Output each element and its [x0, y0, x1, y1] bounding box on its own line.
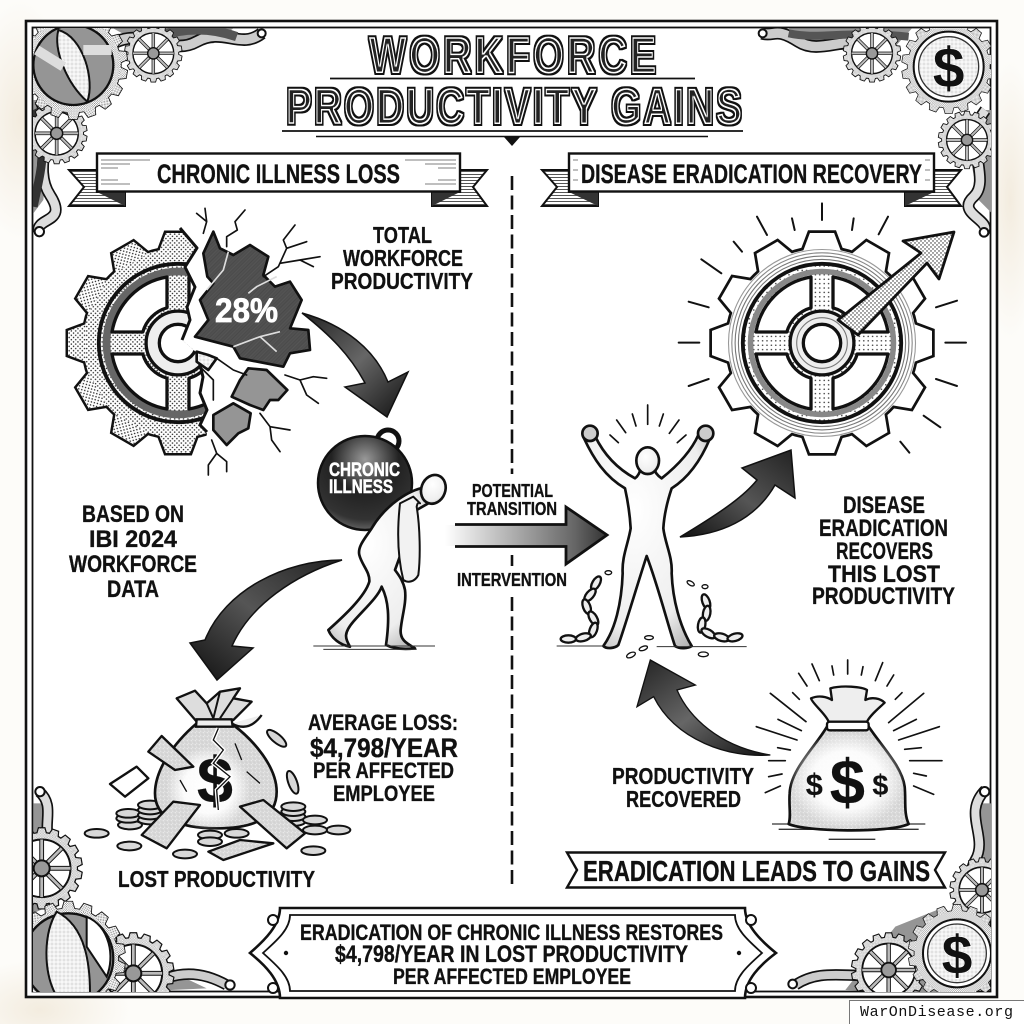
text: disease eradication recovers: DISEASE — [843, 492, 925, 519]
banner: eradication leads to gains: ERADICATION LEADS TO GAINS — [583, 856, 930, 888]
gear — [712, 233, 932, 453]
ground lines — [772, 824, 925, 839]
bent figure — [313, 471, 450, 649]
text: productivity recovered: RECOVERED — [626, 786, 741, 812]
text: average loss: PER AFFECTED — [313, 758, 454, 783]
text: average loss: AVERAGE LOSS: — [308, 710, 458, 735]
banner: chronic illness loss — [69, 154, 487, 206]
bag frill — [177, 688, 252, 722]
bills — [110, 736, 305, 860]
watermark: WarOnDisease.org — [860, 1004, 1013, 1021]
rays above figure — [610, 405, 686, 443]
coin dollar sign bottom right: $ — [942, 924, 972, 986]
text: disease eradication recovers — [812, 492, 955, 610]
rising arrow — [838, 232, 954, 335]
broken gear: chronic illness loss — [68, 208, 327, 475]
text: based on ibi 2024 workforce data: BASED ON — [82, 501, 184, 528]
bag body — [155, 723, 277, 828]
text: lost productivity: LOST PRODUCTIVITY — [118, 866, 315, 892]
title: PRODUCTIVITY GAINS — [286, 78, 742, 135]
coin dollar sign top right: $ — [933, 37, 964, 100]
transition arrow with labels: TRANSITION — [467, 499, 557, 519]
bag crack — [213, 728, 230, 810]
text: average loss: $4,798/YEAR — [310, 733, 458, 763]
watermark — [850, 1000, 1024, 1024]
broken dollar sign: $ — [197, 744, 233, 817]
chain fragments and ground — [557, 571, 747, 659]
28 percent label: 28% — [215, 292, 278, 330]
triumphant figure with broken chains — [557, 405, 747, 659]
title: WORKFORCE — [369, 26, 656, 84]
right broken chain — [697, 593, 743, 643]
intervention label: INTERVENTION — [457, 570, 567, 590]
transition arrow — [445, 507, 607, 564]
chronic illness ball — [318, 436, 412, 530]
text: disease eradication recovers: RECOVERS — [836, 538, 933, 565]
text: disease eradication recovers: THIS LOST — [828, 561, 940, 588]
bag tie — [196, 715, 262, 727]
text: productivity recovered — [612, 763, 754, 812]
text: average loss: EMPLOYEE — [333, 781, 435, 806]
full money bag with rays — [756, 660, 942, 839]
arrow: figure up to gear — [680, 450, 795, 537]
text: based on ibi 2024 workforce data: DATA — [107, 576, 159, 603]
plaque text: ERADICATION OF CHRONIC ILLNESS RESTORES — [300, 920, 723, 945]
recovery gear with rising arrow — [679, 203, 966, 453]
arrow: money bag up to figure — [637, 660, 770, 755]
standing figure — [582, 426, 713, 648]
arrow: gear down to weight — [302, 313, 408, 417]
text: total workforce productivity — [331, 222, 473, 294]
corner ornament: bottom right coin gear and vines — [787, 786, 991, 992]
gear fragments — [197, 352, 287, 445]
bag tie — [827, 722, 869, 730]
left gear remainder — [66, 230, 207, 456]
text: based on ibi 2024 workforce data: IBI 2024 — [89, 526, 177, 553]
full money bag with rays: $ — [806, 768, 823, 802]
corner ornament: top left gears and vines — [33, 28, 267, 238]
text: productivity recovered: PRODUCTIVITY — [612, 763, 754, 789]
text: disease eradication recovers: PRODUCTIVITY — [812, 583, 955, 610]
left broken chain — [561, 575, 603, 643]
text: disease eradication recovers: ERADICATION — [819, 515, 948, 542]
bottom plaque: PER AFFECTED EMPLOYEE — [393, 964, 631, 989]
transition arrow with labels — [445, 481, 607, 590]
banner: chronic illness loss: CHRONIC ILLNESS LOSS — [157, 159, 400, 189]
text: based on ibi 2024 workforce data: WORKFORCE — [69, 551, 197, 578]
bottom plaque — [250, 908, 776, 998]
chronic illness label: CHRONIC — [329, 459, 400, 481]
corner ornament: bottom left gears and vines — [33, 786, 236, 992]
arrow: figure down to money bag — [190, 560, 342, 680]
text: total workforce productivity: WORKFORCE — [343, 245, 463, 271]
money bag with losses — [85, 688, 350, 860]
text: average loss — [308, 710, 458, 806]
coins — [85, 801, 350, 858]
banner: disease eradication recovery — [542, 154, 961, 206]
potential transition label: POTENTIAL — [472, 481, 553, 501]
text: based on ibi 2024 workforce data — [69, 501, 197, 603]
crack edge of gear — [180, 228, 207, 432]
bottom plaque: $4,798/YEAR IN LOST PRODUCTIVITY — [335, 941, 688, 968]
dark broken chunk — [195, 232, 310, 367]
bent figure carrying chronic illness weight: ILLNESS — [329, 476, 393, 498]
rays around gear — [679, 203, 966, 453]
crack lines — [197, 208, 327, 475]
center dashed divider — [511, 176, 513, 888]
corner ornament: top right coin gear and vines — [759, 20, 996, 237]
weight ring — [377, 430, 399, 452]
dollar signs: $ — [830, 748, 865, 818]
title — [282, 26, 743, 146]
bent figure carrying chronic illness weight — [313, 430, 450, 649]
text: total workforce productivity: TOTAL — [373, 222, 432, 248]
text: total workforce productivity: PRODUCTIVITY — [331, 268, 473, 294]
full money bag with rays: $ — [872, 770, 888, 802]
rays — [756, 660, 942, 794]
bag top — [811, 687, 885, 722]
bag — [789, 727, 909, 830]
